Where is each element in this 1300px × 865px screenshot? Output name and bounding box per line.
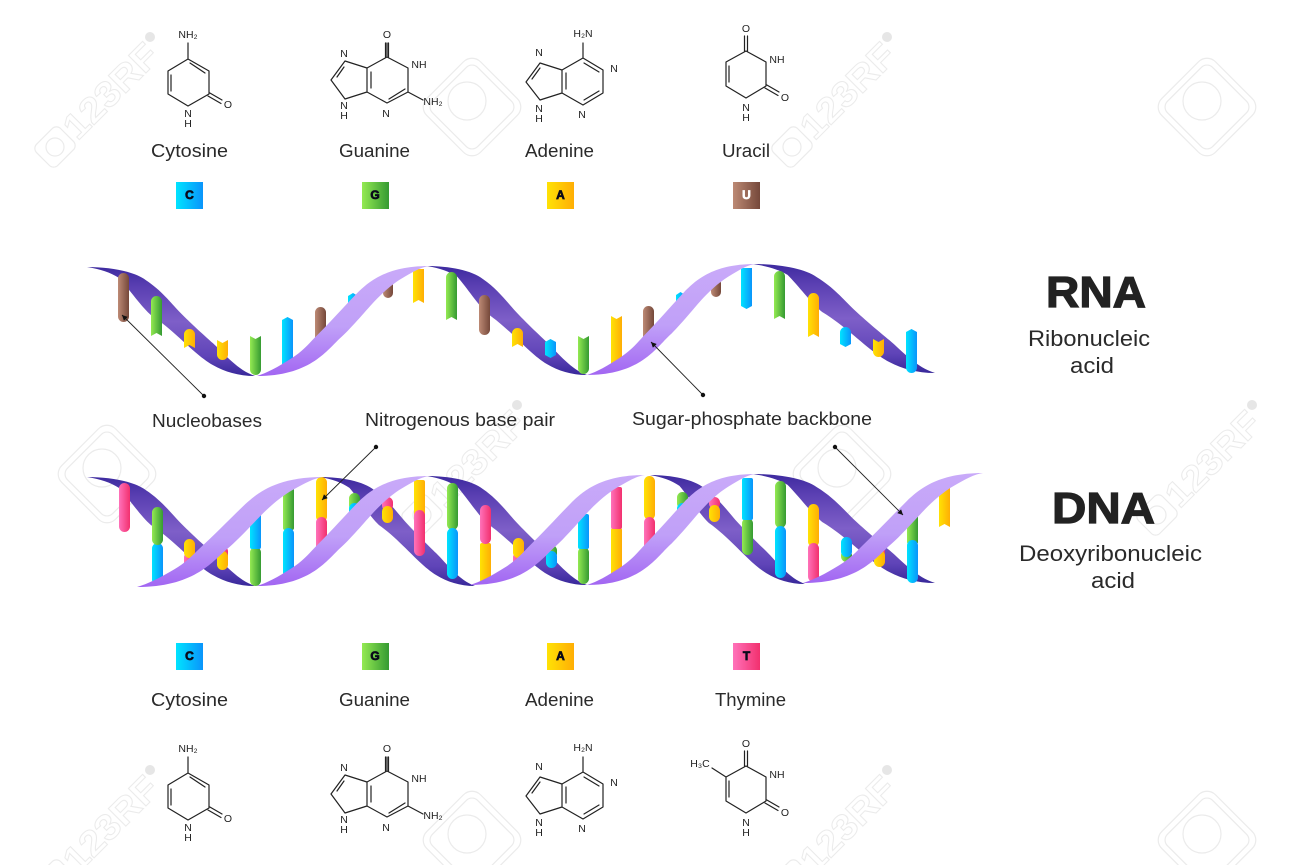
molecule: uracil: O — [742, 23, 750, 35]
molecule: guanine (DNA) — [331, 743, 443, 836]
badge: A — [547, 643, 574, 670]
molecule: guanine (DNA): N — [340, 814, 348, 826]
molecule: guanine (DNA): O — [383, 743, 391, 755]
badge: A — [547, 182, 574, 209]
molecule: cytosine (DNA): H — [184, 832, 192, 844]
molecule: uracil — [726, 23, 789, 124]
molecule: guanine (DNA): NH — [411, 773, 427, 785]
callout: nitrogenous base pair pointer — [322, 445, 378, 500]
molecule: guanine (DNA): N — [340, 762, 348, 774]
DNA helix — [87, 473, 983, 587]
backbone: light strand segments — [257, 264, 755, 376]
text: Deoxyribonucleic acid: acid — [1091, 568, 1135, 593]
molecule: adenine (RNA): H — [535, 113, 543, 125]
molecule: cytosine (RNA): NH₂ — [178, 29, 198, 41]
label: Thymine: Thymine — [715, 690, 786, 710]
label: Cytosine: Cytosine — [151, 141, 228, 161]
text: Ribonucleic acid — [1028, 326, 1150, 378]
label: Cytosine: Cytosine — [151, 690, 228, 710]
RNA nucleobase structures row — [151, 23, 789, 209]
molecule: guanine (RNA): H — [340, 110, 348, 122]
label: Nucleobases: Nucleobases — [152, 411, 262, 431]
molecule: adenine (DNA) — [526, 742, 618, 839]
molecule: adenine (RNA) — [526, 28, 618, 125]
molecule: adenine (DNA): N — [610, 777, 618, 789]
badge: G: G — [370, 188, 380, 202]
molecule: adenine (RNA): H₂N — [573, 28, 593, 40]
molecule: guanine (DNA): NH₂ — [423, 810, 443, 822]
molecule: guanine (DNA): N — [382, 822, 390, 834]
molecule: cytosine (DNA): NH₂ — [178, 743, 198, 755]
RNA helix — [87, 264, 935, 376]
nucleobases: DNA base pair rungs — [119, 476, 950, 586]
molecule: thymine: H₃C — [690, 758, 710, 770]
molecule: adenine (DNA): N — [578, 823, 586, 835]
label: Adenine: Adenine — [525, 141, 594, 161]
badge: U: U — [742, 188, 751, 202]
label: Nitrogenous base pair: Nitrogenous base pair — [365, 410, 555, 430]
molecule: cytosine (RNA): N — [184, 108, 192, 120]
molecule: adenine (RNA): N — [610, 63, 618, 75]
text: Deoxyribonucleic acid: Deoxyribonucleic — [1019, 541, 1202, 566]
badge: G — [362, 643, 389, 670]
molecule: cytosine (RNA): O — [224, 99, 232, 111]
badge: U — [733, 182, 760, 209]
callout: DNA backbone pointer — [833, 445, 903, 515]
molecule: adenine (DNA): N — [535, 817, 543, 829]
molecule: cytosine (DNA): N — [184, 822, 192, 834]
molecule: uracil: NH — [769, 54, 785, 66]
callout: sugar-phosphate backbone pointer — [651, 342, 705, 397]
molecule: adenine (DNA): N — [535, 761, 543, 773]
badge: T — [733, 643, 760, 670]
badge: T: T — [743, 649, 751, 663]
molecule: thymine: O — [742, 738, 750, 750]
background watermarks: 123RF — [791, 35, 904, 147]
molecule: adenine (DNA): H₂N — [573, 742, 593, 754]
molecule: guanine (RNA): NH₂ — [423, 96, 443, 108]
molecule: guanine (DNA): H — [340, 824, 348, 836]
molecule: adenine (RNA): N — [578, 109, 586, 121]
backbone: dark strand segments — [87, 474, 935, 586]
molecule: adenine (RNA): N — [535, 103, 543, 115]
heading: RNA: RNA — [1046, 268, 1146, 317]
molecule: adenine (DNA): H — [535, 827, 543, 839]
molecule: thymine: H — [742, 827, 750, 839]
molecule: cytosine (DNA): O — [224, 813, 232, 825]
DNA nucleobase structures row — [151, 643, 789, 844]
text: Ribonucleic acid: Ribonucleic — [1028, 326, 1150, 351]
text: Deoxyribonucleic acid — [1019, 541, 1202, 593]
backbone: light strand segments — [137, 473, 983, 587]
molecule: adenine (RNA): N — [535, 47, 543, 59]
badge: C: C — [185, 188, 194, 202]
background watermarks: 123RF — [54, 35, 167, 147]
molecule: uracil: N — [742, 102, 750, 114]
badge: A: A — [556, 649, 565, 663]
text: Ribonucleic acid: acid — [1070, 353, 1114, 378]
badge: G: G — [370, 649, 380, 663]
molecule: thymine: NH — [769, 769, 785, 781]
molecule: guanine (RNA) — [331, 29, 443, 122]
background watermarks: 123RF — [421, 403, 534, 515]
molecule: guanine (RNA): N — [340, 48, 348, 60]
badge: C — [176, 182, 203, 209]
molecule: cytosine (RNA): H — [184, 118, 192, 130]
molecule: guanine (RNA): N — [340, 100, 348, 112]
backbone: dark strand segments — [87, 264, 935, 376]
molecule: thymine — [690, 738, 789, 839]
label: Sugar-phosphate backbone: Sugar-phosphate backbone — [632, 409, 872, 429]
molecule: guanine (RNA): N — [382, 108, 390, 120]
badge: C — [176, 643, 203, 670]
molecule: cytosine (DNA) — [168, 743, 232, 844]
label: Uracil: Uracil — [722, 141, 770, 161]
badge: A: A — [556, 188, 565, 202]
molecule: thymine: O — [781, 807, 789, 819]
molecule: uracil: O — [781, 92, 789, 104]
nucleobases: RNA rungs — [118, 268, 917, 375]
molecule: guanine (RNA): NH — [411, 59, 427, 71]
label: Adenine: Adenine — [525, 690, 594, 710]
callout: nucleobases pointer — [122, 315, 206, 398]
label: Guanine: Guanine — [339, 690, 410, 710]
molecule: guanine (RNA): O — [383, 29, 391, 41]
molecule: thymine: N — [742, 817, 750, 829]
label: Guanine: Guanine — [339, 141, 410, 161]
background watermarks: 123RF — [1156, 403, 1269, 515]
molecule: cytosine (RNA) — [168, 29, 232, 130]
heading: DNA: DNA — [1052, 484, 1155, 533]
badge: C: C — [185, 649, 194, 663]
molecule: uracil: H — [742, 112, 750, 124]
badge: G — [362, 182, 389, 209]
